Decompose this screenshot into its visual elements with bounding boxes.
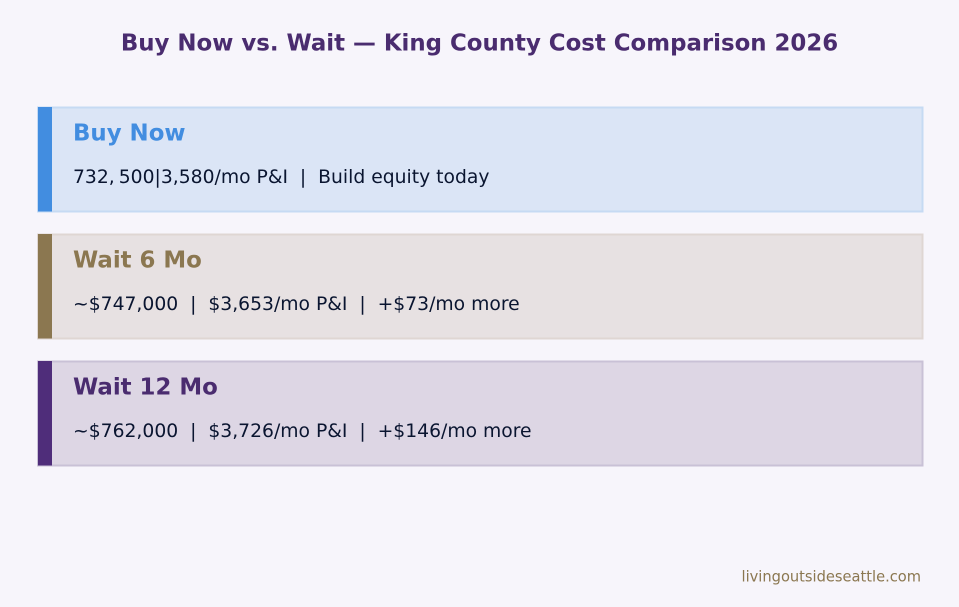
source credit: livingoutsideseattle.com — [742, 568, 921, 586]
panel background: wait 12 months — [38, 362, 922, 466]
panel: wait 12 months — [38, 361, 922, 466]
details: wait 12 months: ~$762,000 | $3,726/mo P&I | +$146/mo more — [73, 421, 532, 442]
details: wait 6 months: ~$747,000 | $3,653/mo P&I | +$73/mo more — [73, 294, 520, 315]
panel: buy now — [38, 107, 922, 212]
accent bar: wait 6 months — [38, 234, 52, 338]
panel background: buy now — [38, 108, 922, 212]
accent bar: wait 12 months — [38, 361, 52, 466]
accent bar: buy now — [38, 107, 52, 212]
panel: wait 6 months — [38, 234, 922, 338]
details: buy now: 732,500|3,580/mo P&I | Build equity today — [73, 167, 489, 188]
heading: wait 6 months: Wait 6 Mo — [73, 248, 202, 274]
heading: buy now: Buy Now — [73, 120, 186, 146]
heading: wait 12 months: Wait 12 Mo — [73, 374, 218, 400]
panel background: wait 6 months — [38, 234, 922, 338]
title: Buy Now vs. Wait — King County Cost Comparison 2026 — [121, 30, 838, 56]
